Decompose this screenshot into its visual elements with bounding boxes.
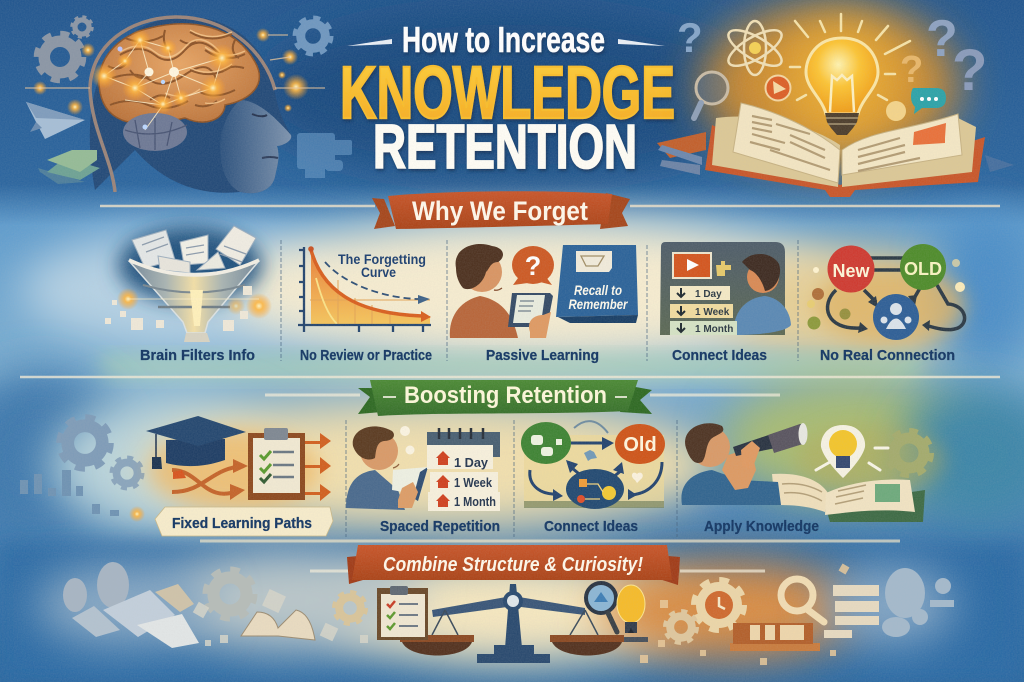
- icon: brain: [99, 24, 259, 125]
- separators row one: [281, 240, 798, 361]
- small heart and splash: [632, 473, 643, 483]
- title line 3: RETENTION: [373, 113, 637, 182]
- banner: boosting retention: [358, 380, 652, 416]
- title: [340, 19, 675, 182]
- icon: calendar: 1 Week: [454, 475, 493, 490]
- icon: page text: [750, 116, 920, 171]
- icon: small gear: [335, 593, 365, 623]
- connection arrows: [828, 258, 965, 330]
- panel: brain filters info: [105, 226, 272, 364]
- panel: apply knowledge: [681, 423, 945, 535]
- node: ideas bubble: [521, 422, 571, 464]
- icon: rays: [790, 14, 910, 100]
- panel: spaced repetition: [346, 426, 500, 535]
- icon: scale stand: [477, 584, 550, 663]
- brain and head illustration: [90, 17, 291, 193]
- icon: calendar: [427, 428, 500, 511]
- icons: gears around the head: [38, 17, 330, 79]
- label ribbon: [155, 507, 333, 536]
- chart title: The Forgetting: [338, 251, 426, 267]
- icons: glowing data squares: [105, 286, 272, 331]
- forgetting curve chart: [298, 246, 431, 332]
- open book and lightbulb illustration: [657, 3, 1014, 197]
- icon: lightbulb: [617, 585, 645, 633]
- node: old: OLD: [904, 259, 942, 279]
- icon: small books left: [657, 132, 706, 158]
- scattered tiles: [193, 589, 368, 646]
- learner from behind: [733, 254, 791, 335]
- panel: connect ideas (boosting): [521, 421, 665, 535]
- icon: tablet: [508, 293, 553, 338]
- icon: left pages: [712, 117, 840, 187]
- link arcs and arrows: [530, 421, 662, 495]
- recall card: [556, 245, 638, 323]
- decorative icons, bottom right: [640, 564, 954, 665]
- node: new: New: [832, 261, 871, 281]
- node: concept map: [566, 469, 624, 509]
- icons: question marks: ?: [926, 10, 958, 68]
- icon: pale cubes: [882, 568, 954, 637]
- output arrows: [305, 433, 331, 501]
- panel: no review or practice: [298, 246, 432, 364]
- icon: left pan: [400, 635, 474, 656]
- label: No Real Connection: [820, 347, 955, 364]
- learner figure: [450, 244, 518, 338]
- icon: clipboard: [248, 428, 305, 500]
- banner: why we forget: Why We Forget: [412, 196, 588, 226]
- icon: magnifier: [781, 579, 824, 622]
- icon: lightbulb pin: [816, 425, 888, 478]
- icon: right pan: [550, 635, 648, 656]
- icon: decorative gear: [888, 432, 930, 474]
- label: Apply Knowledge: [704, 518, 819, 535]
- schedule tags: 1 Day: [695, 289, 722, 300]
- icon: bookshelf: [730, 623, 820, 651]
- small puzzle icon: [716, 261, 731, 276]
- node: old: [615, 424, 665, 464]
- sparkle points left and right: [25, 28, 325, 115]
- icon: open book: [241, 610, 315, 640]
- panel: no real connection: [807, 244, 965, 364]
- label: Connect Ideas: [544, 518, 638, 535]
- recall card: Remember: [568, 296, 629, 312]
- icon: magnifier: [586, 583, 617, 632]
- panel: connect ideas: [660, 242, 791, 364]
- icon: person-shaped faded puzzle: [297, 133, 352, 178]
- icon: stacked green books: [38, 150, 100, 184]
- icons: question marks: ?: [900, 49, 923, 91]
- icon: lightbulb: [806, 38, 878, 114]
- icon: paper plane: [26, 102, 85, 139]
- learner writing: [346, 426, 428, 510]
- icon: head silhouette: [90, 17, 291, 193]
- icon: graduation cap: [146, 416, 246, 469]
- banner: why we forget: [372, 191, 630, 229]
- banner: combine structure and curiosity: Combine Structure & Curiosity!: [383, 554, 643, 576]
- learner with telescope: [681, 423, 808, 505]
- icon: stacked cubes: [72, 584, 199, 648]
- title line 1: How to Increase: [402, 19, 605, 60]
- icon: play button: [766, 76, 790, 100]
- schedule tags: 1 Month: [695, 324, 733, 335]
- icon: data cylinders: [63, 562, 129, 612]
- panel: no review or practice: Curve: [361, 264, 396, 280]
- icon: pale medallion: [886, 101, 906, 121]
- icon: clock gear: [695, 581, 743, 629]
- node: old: Old: [623, 434, 657, 456]
- node: old: [900, 244, 946, 290]
- schedule tags: 1 Week: [695, 307, 730, 318]
- glowing nodes: [91, 29, 236, 130]
- label: Passive Learning: [486, 347, 599, 364]
- icon: small gear: [666, 612, 696, 642]
- icon: chat bubble: [911, 88, 946, 114]
- icon: open book: [772, 474, 925, 522]
- icon: atom: [724, 21, 786, 75]
- icon: calendar: 1 Month: [454, 494, 496, 509]
- panel: fixed learning paths: [146, 416, 333, 536]
- icon: pan strings: [432, 610, 598, 635]
- icons: question marks: ?: [952, 38, 987, 103]
- icon: funnel: [130, 262, 258, 333]
- label ribbon: Fixed Learning Paths: [172, 515, 312, 532]
- icon: clipboard with checks: [377, 586, 428, 640]
- icon: book cover: [705, 125, 985, 197]
- recall card: Recall to: [574, 282, 622, 298]
- icon: scale beam: [432, 596, 585, 617]
- balance scale illustration: [377, 583, 648, 663]
- neural network lines: [104, 40, 222, 130]
- title line 2: KNOWLEDGE: [340, 51, 675, 134]
- schedule tags: [670, 286, 737, 335]
- separators row two: [346, 420, 677, 537]
- scattered tiles: [640, 564, 849, 665]
- label: Brain Filters Info: [140, 347, 255, 364]
- icons: question marks: ?: [677, 14, 703, 61]
- icon: stacked bars: [824, 585, 879, 638]
- label: Connect Ideas: [672, 347, 767, 364]
- icon: magnifier: [694, 72, 728, 118]
- panel: passive learning: [450, 244, 638, 364]
- node: new: [828, 246, 874, 292]
- label: Spaced Repetition: [380, 518, 500, 535]
- video icon: [673, 253, 711, 278]
- banner: combine structure and curiosity: [347, 545, 680, 585]
- decorative icons, bottom left: [63, 562, 368, 648]
- icon: papers in funnel: [132, 226, 256, 273]
- decorative gears and bits, row two left: [20, 419, 145, 522]
- icon: question bubble: [512, 246, 554, 285]
- icon: question bubble: ?: [525, 251, 541, 281]
- coloured dots: [807, 259, 965, 330]
- banner: boosting retention: Boosting Retention: [404, 382, 607, 409]
- icon: calendar: 1 Day: [454, 455, 489, 470]
- icons: question marks: [677, 10, 987, 103]
- icon: gear: [207, 571, 253, 617]
- icon: right pages: [842, 118, 976, 187]
- crossing path arrows: [172, 459, 248, 500]
- label: No Review or Practice: [300, 347, 432, 364]
- node: people: [873, 294, 919, 340]
